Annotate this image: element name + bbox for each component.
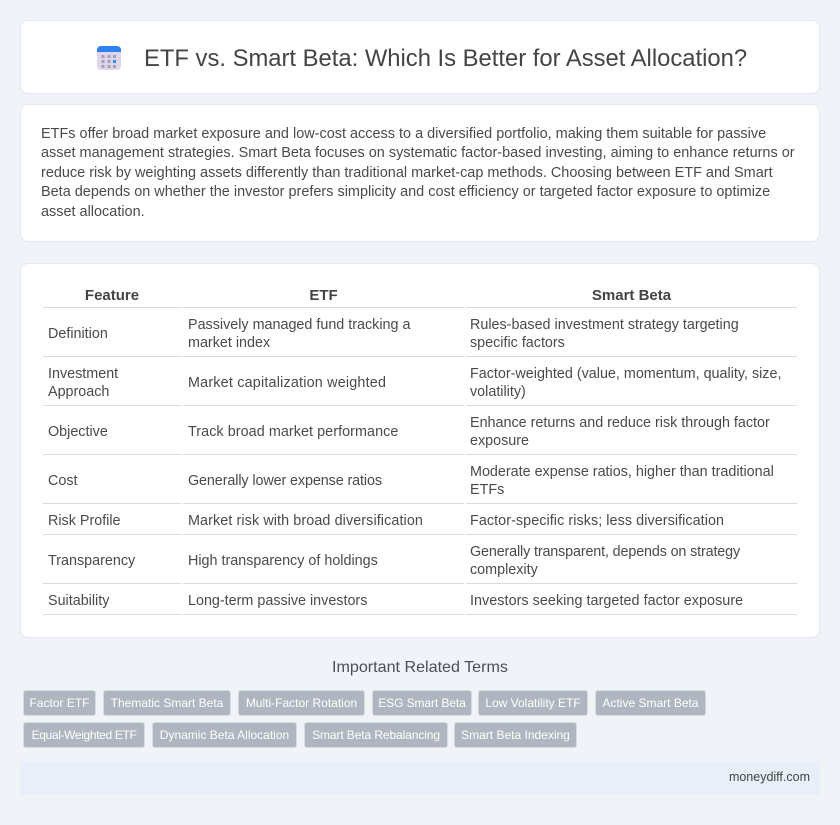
row: suitability: Investors seeking targeted factor exposure: [470, 593, 743, 609]
row: investment approach: Factor-weighted (value, momentum, quality, size,: [470, 366, 781, 382]
row: objective: Objective: [48, 424, 108, 440]
row: cost: Moderate expense ratios, higher than traditional: [470, 464, 774, 480]
row: investment approach: Market capitalization weighted: [188, 375, 386, 391]
intro text: asset management strategies. Smart Beta focuses on systematic factor-based investing, aiming to enhance returns or: [41, 145, 795, 161]
row: suitability: Long-term passive investors: [188, 593, 367, 609]
related term tags: Smart Beta Indexing: [461, 728, 570, 742]
row: risk profile: [48, 513, 724, 529]
intro text: asset allocation.: [41, 204, 145, 220]
row: definition: market index: [188, 335, 270, 351]
row: transparency: [48, 544, 740, 578]
row: definition: Rules-based investment strategy targeting: [470, 317, 739, 333]
row: definition: specific factors: [470, 335, 565, 351]
row: risk profile: Factor-specific risks; less diversification: [470, 513, 724, 529]
related term tags: Thematic Smart Beta: [111, 696, 223, 710]
related term tags: Active Smart Beta: [602, 696, 699, 710]
row: definition: Definition: [48, 326, 108, 342]
related term tags: Low Volatility ETF: [485, 696, 581, 710]
related term tags: Dynamic Beta Allocation: [160, 728, 289, 742]
header card: [20, 20, 820, 94]
row: investment approach: Approach: [48, 384, 109, 400]
row: definition: [48, 317, 739, 351]
row: cost: Generally lower expense ratios: [188, 473, 382, 489]
row: transparency: complexity: [470, 562, 538, 578]
related terms heading: Important Related Terms: [332, 658, 508, 676]
row: investment approach: volatility): [470, 384, 526, 400]
intro card: [20, 104, 820, 242]
row: definition: Passively managed fund tracking a: [188, 317, 410, 333]
related term tags: ESG Smart Beta: [378, 696, 466, 710]
footer source: moneydiff.com: [729, 770, 810, 784]
related term tags: Equal-Weighted ETF: [32, 728, 136, 742]
row: transparency: Transparency: [48, 553, 135, 569]
icon: calendar: [97, 46, 121, 70]
title: ETF vs. Smart Beta: Which Is Better for Asset Allocation?: [144, 45, 747, 72]
comparison table card: [20, 263, 820, 638]
row: objective: Track broad market performance: [188, 424, 398, 440]
row: risk profile: Risk Profile: [48, 513, 121, 529]
related term tags: Smart Beta Rebalancing: [312, 728, 440, 742]
footer bar: [20, 761, 820, 795]
row: suitability: [48, 593, 743, 609]
table header: Feature: [85, 287, 139, 304]
row: cost: Cost: [48, 473, 78, 489]
row: cost: ETFs: [470, 482, 504, 498]
table header: ETF: [309, 287, 338, 304]
related term tags: [23, 690, 706, 748]
intro text: Beta depends on whether the investor prefers simplicity and cost efficiency or targeted factor exposure to optimize: [41, 184, 770, 200]
row: objective: [48, 415, 770, 449]
intro text: reduce risk by weighting assets differently than traditional market-cap methods. Choosing between ETF and Smart: [41, 165, 773, 181]
row: objective: exposure: [470, 433, 529, 449]
row: cost: [48, 464, 774, 498]
intro text: ETFs offer broad market exposure and low-cost access to a diversified portfolio, making them suitable for passive: [41, 126, 766, 142]
row: investment approach: Investment: [48, 366, 118, 382]
row: investment approach: [48, 366, 781, 400]
row: transparency: Generally transparent, depends on strategy: [470, 544, 740, 560]
related term tags: Factor ETF: [29, 696, 90, 710]
row: objective: Enhance returns and reduce risk through factor: [470, 415, 770, 431]
row: risk profile: Market risk with broad diversification: [188, 513, 423, 529]
related term tags: Multi-Factor Rotation: [246, 696, 357, 710]
intro text: [41, 126, 795, 220]
table header: [85, 287, 672, 304]
table header: Smart Beta: [592, 287, 671, 304]
row: suitability: Suitability: [48, 593, 109, 609]
row: transparency: High transparency of holdings: [188, 553, 378, 569]
